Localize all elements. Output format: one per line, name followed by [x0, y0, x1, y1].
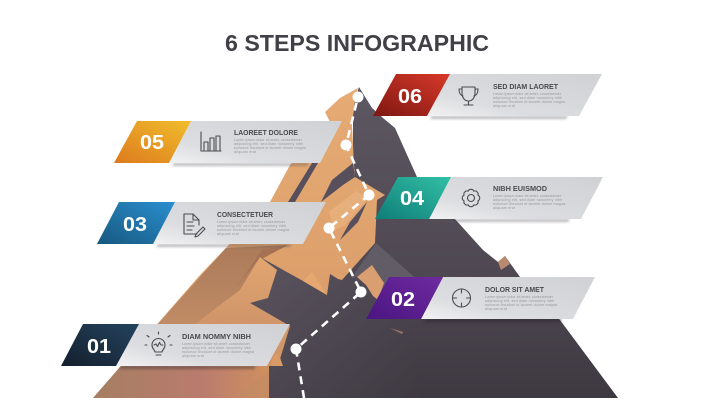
step 01 banner: euismod tincidunt ut laoreet dolore magna: [182, 350, 254, 354]
step 01 banner: adipiscing elit, sed diam nonummy nibh: [182, 346, 251, 350]
step 03 banner: [97, 202, 326, 247]
step 02 banner: Lorem ipsum dolor sit amet, consectetuer: [485, 295, 554, 299]
road path: [290, 92, 374, 398]
step 04 banner: 04: [400, 188, 425, 210]
step 06 banner: aliquam erat: [493, 104, 515, 108]
step 06 banner: [373, 74, 602, 119]
icon: trophy: [459, 87, 478, 105]
step 03 banner: 03: [123, 214, 147, 236]
step 05 banner: euismod tincidunt ut laoreet dolore magna: [234, 146, 306, 150]
step 01 banner: 01: [87, 336, 111, 358]
step 05 banner: adipiscing elit, sed diam nonummy nibh: [234, 142, 303, 146]
step 02 banner: 02: [391, 289, 415, 311]
step 01 banner: DIAM NOMMY NIBH: [182, 332, 251, 341]
title: 6 STEPS INFOGRAPHIC: [225, 30, 489, 56]
step 02 banner: DOLOR SIT AMET: [485, 285, 544, 294]
step 01 banner: Lorem ipsum dolor sit amet, consectetuer: [182, 342, 251, 346]
step 05 banner: 05: [140, 132, 164, 154]
waypoint markers: [290, 92, 374, 354]
step 03 banner: euismod tincidunt ut laoreet dolore magna: [217, 228, 289, 232]
step 04 banner: euismod tincidunt ut laoreet dolore magna: [493, 202, 565, 206]
step 02 banner: adipiscing elit, sed diam nonummy nibh: [485, 299, 554, 303]
step 06 banner: euismod tincidunt ut laoreet dolore magna: [493, 100, 565, 104]
icon: light bulb: [145, 332, 172, 355]
icon: target: [452, 289, 470, 307]
step 04 banner: NIBH EUISMOD: [493, 184, 548, 193]
step 01 banner: aliquam erat: [182, 354, 204, 358]
mountain illustration: [93, 87, 618, 398]
step 02 banner: [366, 277, 595, 322]
step 05 banner: Lorem ipsum dolor sit amet, consectetuer: [234, 138, 303, 142]
step 06 banner: 06: [398, 86, 422, 108]
step 04 banner: Lorem ipsum dolor sit amet, consectetuer: [493, 194, 562, 198]
step 06 banner: Lorem ipsum dolor sit amet, consectetuer: [493, 92, 562, 96]
icon: document with pencil: [184, 214, 205, 237]
icon: bar chart: [201, 132, 221, 151]
step 06 banner: adipiscing elit, sed diam nonummy nibh: [493, 96, 562, 100]
step 03 banner: adipiscing elit, sed diam nonummy nibh: [217, 224, 286, 228]
step 03 banner: aliquam erat: [217, 232, 239, 236]
step 01 banner: [61, 324, 290, 369]
step 02 banner: aliquam erat: [485, 307, 507, 311]
step 04 banner: adipiscing elit, sed diam nonummy nibh: [493, 198, 562, 202]
step 02 banner: euismod tincidunt ut laoreet dolore magna: [485, 303, 557, 307]
step 06 banner: SED DIAM LAORET: [493, 82, 558, 91]
step 04 banner: aliquam erat: [493, 206, 515, 210]
step 05 banner: LAOREET DOLORE: [234, 128, 298, 137]
icon: gear: [462, 189, 480, 207]
step 05 banner: [114, 121, 342, 166]
step 03 banner: CONSECTETUER: [217, 210, 274, 219]
step 05 banner: aliquam erat: [234, 150, 256, 154]
step 03 banner: Lorem ipsum dolor sit amet, consectetuer: [217, 220, 286, 224]
step 04 banner: [375, 177, 603, 222]
